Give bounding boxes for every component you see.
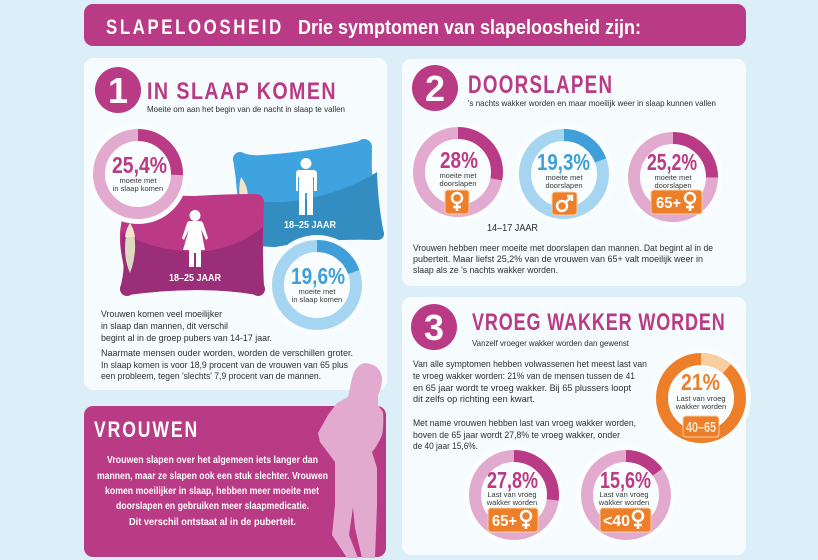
donut 25,4%: 25,4% — [112, 152, 167, 178]
donut 19,6%: moeite met — [298, 287, 336, 296]
man icon — [296, 158, 317, 215]
donut 19,3% — [514, 124, 614, 224]
donut 19,3%: moeite met — [545, 173, 583, 182]
magenta pillow age label: 18–25 JAAR — [169, 273, 222, 284]
donut 25,4%: moeite met — [119, 176, 157, 185]
vrouwen text: komen moeilijker in slaap, hebben meer moeite met — [105, 486, 320, 497]
magenta pillow with woman icon — [120, 194, 265, 296]
panel 1: in slaap komen — [84, 58, 387, 390]
donut 28% — [408, 122, 508, 222]
vrouwen text: Vrouwen slapen over het algemeen iets langer dan — [107, 455, 318, 466]
donut 21%: 21% — [681, 369, 720, 395]
banner subtitle: Drie symptomen van slapeloosheid zijn: — [298, 17, 641, 39]
donut 25,2%: doorslapen — [654, 181, 692, 190]
age label 14-17 jaar: 14–17 JAAR — [487, 223, 538, 234]
40-65 badge: 40–65 — [686, 419, 716, 436]
number badge 2: 2 — [425, 68, 445, 109]
subheading 2: 's nachts wakker worden en maar moeilijk weer in slaap kunnen vallen — [468, 98, 716, 108]
number badge 3: 3 — [424, 307, 444, 348]
heading 1: IN SLAAP KOMEN — [147, 77, 336, 104]
body text panel 3: en 65 jaar wordt te vroeg wakker. Bij 65 plussers loopt — [413, 383, 631, 394]
body text panel 1: Vrouwen komen veel moeilijker — [101, 309, 222, 320]
donut 25,4%: in slaap komen — [113, 184, 163, 193]
donut 21%: Last van vroeg — [676, 394, 726, 403]
body text panel 1: In slaap komen is voor 18,9 procent van de vrouwen van 65 plus — [101, 360, 348, 371]
donut 19,6%: 19,6% — [291, 263, 345, 289]
donut 19,3%: 19,3% — [537, 149, 590, 175]
donut 15,6%: 15,6% — [600, 467, 651, 493]
number badge 2 — [412, 65, 458, 111]
body text panel 3: te vroeg wakker worden: 21% van de mensen tussen de 41 — [413, 371, 635, 382]
vrouwen text: Dit verschil ontstaat al in de puberteit. — [129, 517, 296, 528]
donut 25,2%: moeite met — [654, 173, 692, 182]
male badge — [552, 192, 577, 215]
woman icon — [182, 210, 208, 267]
blue pillow with man icon — [233, 139, 384, 247]
subheading 1: Moeite om aan het begin van de nacht in slaap te vallen — [147, 104, 345, 114]
subheading 3: Vanzelf vroeger wakker worden dan gewenst — [472, 338, 630, 348]
heading 3: VROEG WAKKER WORDEN — [472, 310, 725, 336]
65+ female badge: 65+ — [656, 195, 681, 212]
body text panel 1 — [101, 309, 353, 382]
donut 19,3%: doorslapen — [545, 181, 583, 190]
donut 28%: moeite met — [439, 171, 477, 180]
body text panel 1: begint al in de groep pubers van 14-17 jaar. — [101, 333, 272, 344]
donut 15,6%: Last van vroeg — [599, 490, 649, 499]
body text panel 2: puberteit. Maar liefst 25,2% van de vrouwen van 65+ valt moeilijk weer in — [413, 254, 703, 265]
donut 25,4% — [88, 124, 188, 224]
under 40 female badge: <40 — [603, 513, 630, 530]
blue pillow age label: 18–25 JAAR — [284, 220, 337, 231]
number badge 1 — [95, 67, 141, 113]
female badge — [445, 190, 469, 214]
body text panel 3: Van alle symptomen hebben volwassenen het meest last van — [413, 359, 647, 370]
body text panel 1: een probleem, tegen 'slechts' 7,9 procent van de mannen. — [101, 371, 321, 382]
vrouwen text — [97, 455, 328, 528]
donut 19,6%: in slaap komen — [292, 295, 342, 304]
donut 27,8%: 27,8% — [487, 467, 538, 493]
donut 27,8%: Last van vroeg — [487, 490, 537, 499]
donut 25,2%: 25,2% — [647, 149, 697, 175]
donut 19,6% — [267, 235, 367, 335]
donut 15,6%: wakker worden — [598, 498, 649, 507]
vrouwen text: doorslapen en gebruiken meer slaapmedicatie. — [116, 501, 309, 512]
65+ female badge: 65+ — [492, 513, 517, 530]
body text panel 2: slaap als ze 's nachts wakker worden. — [413, 265, 558, 276]
donut 21%: wakker worden — [675, 402, 726, 411]
body text panel 1: in slaap dan mannen, dit verschil — [101, 321, 228, 332]
number badge 1: 1 — [108, 70, 128, 111]
donut 21% — [651, 348, 751, 448]
panel 2: doorslapen — [402, 59, 746, 286]
body text panel 3: Met name vrouwen hebben last van vroeg wakker worden, — [413, 418, 636, 429]
body text panel 3: dit zelfs op richting een kwart. — [413, 394, 535, 405]
header banner — [84, 4, 746, 46]
banner title: SLAPELOOSHEID — [106, 16, 281, 40]
vrouwen text: mannen, maar ze slapen ook een stuk slechter. Vrouwen — [97, 471, 328, 482]
donut 27,8%: wakker worden — [486, 498, 537, 507]
donut 27,8% — [464, 445, 564, 545]
donut 28%: doorslapen — [439, 179, 477, 188]
body text panel 3: boven de 65 jaar wordt 27,8% te vroeg wakker, onder — [413, 430, 620, 441]
panel: vrouwen — [84, 406, 386, 557]
vrouwen heading: VROUWEN — [94, 418, 197, 443]
donut 28%: 28% — [440, 147, 478, 173]
donut 15,6% — [576, 445, 676, 545]
panel 3: vroeg wakker worden — [402, 297, 751, 555]
body text panel 2 — [413, 243, 713, 276]
woman silhouette — [318, 363, 383, 558]
heading 2: DOORSLAPEN — [468, 70, 612, 99]
donut 25,2% — [623, 127, 723, 227]
body text panel 3: de 40 jaar 15,6%. — [413, 441, 478, 452]
body text panel 2: Vrouwen hebben meer moeite met doorslapen dan mannen. Dat begint al in de — [413, 243, 713, 254]
body text panel 1: Naarmate mensen ouder worden, worden de verschillen groter. — [101, 348, 353, 359]
number badge 3 — [411, 304, 457, 350]
body text panel 3 — [413, 359, 647, 452]
